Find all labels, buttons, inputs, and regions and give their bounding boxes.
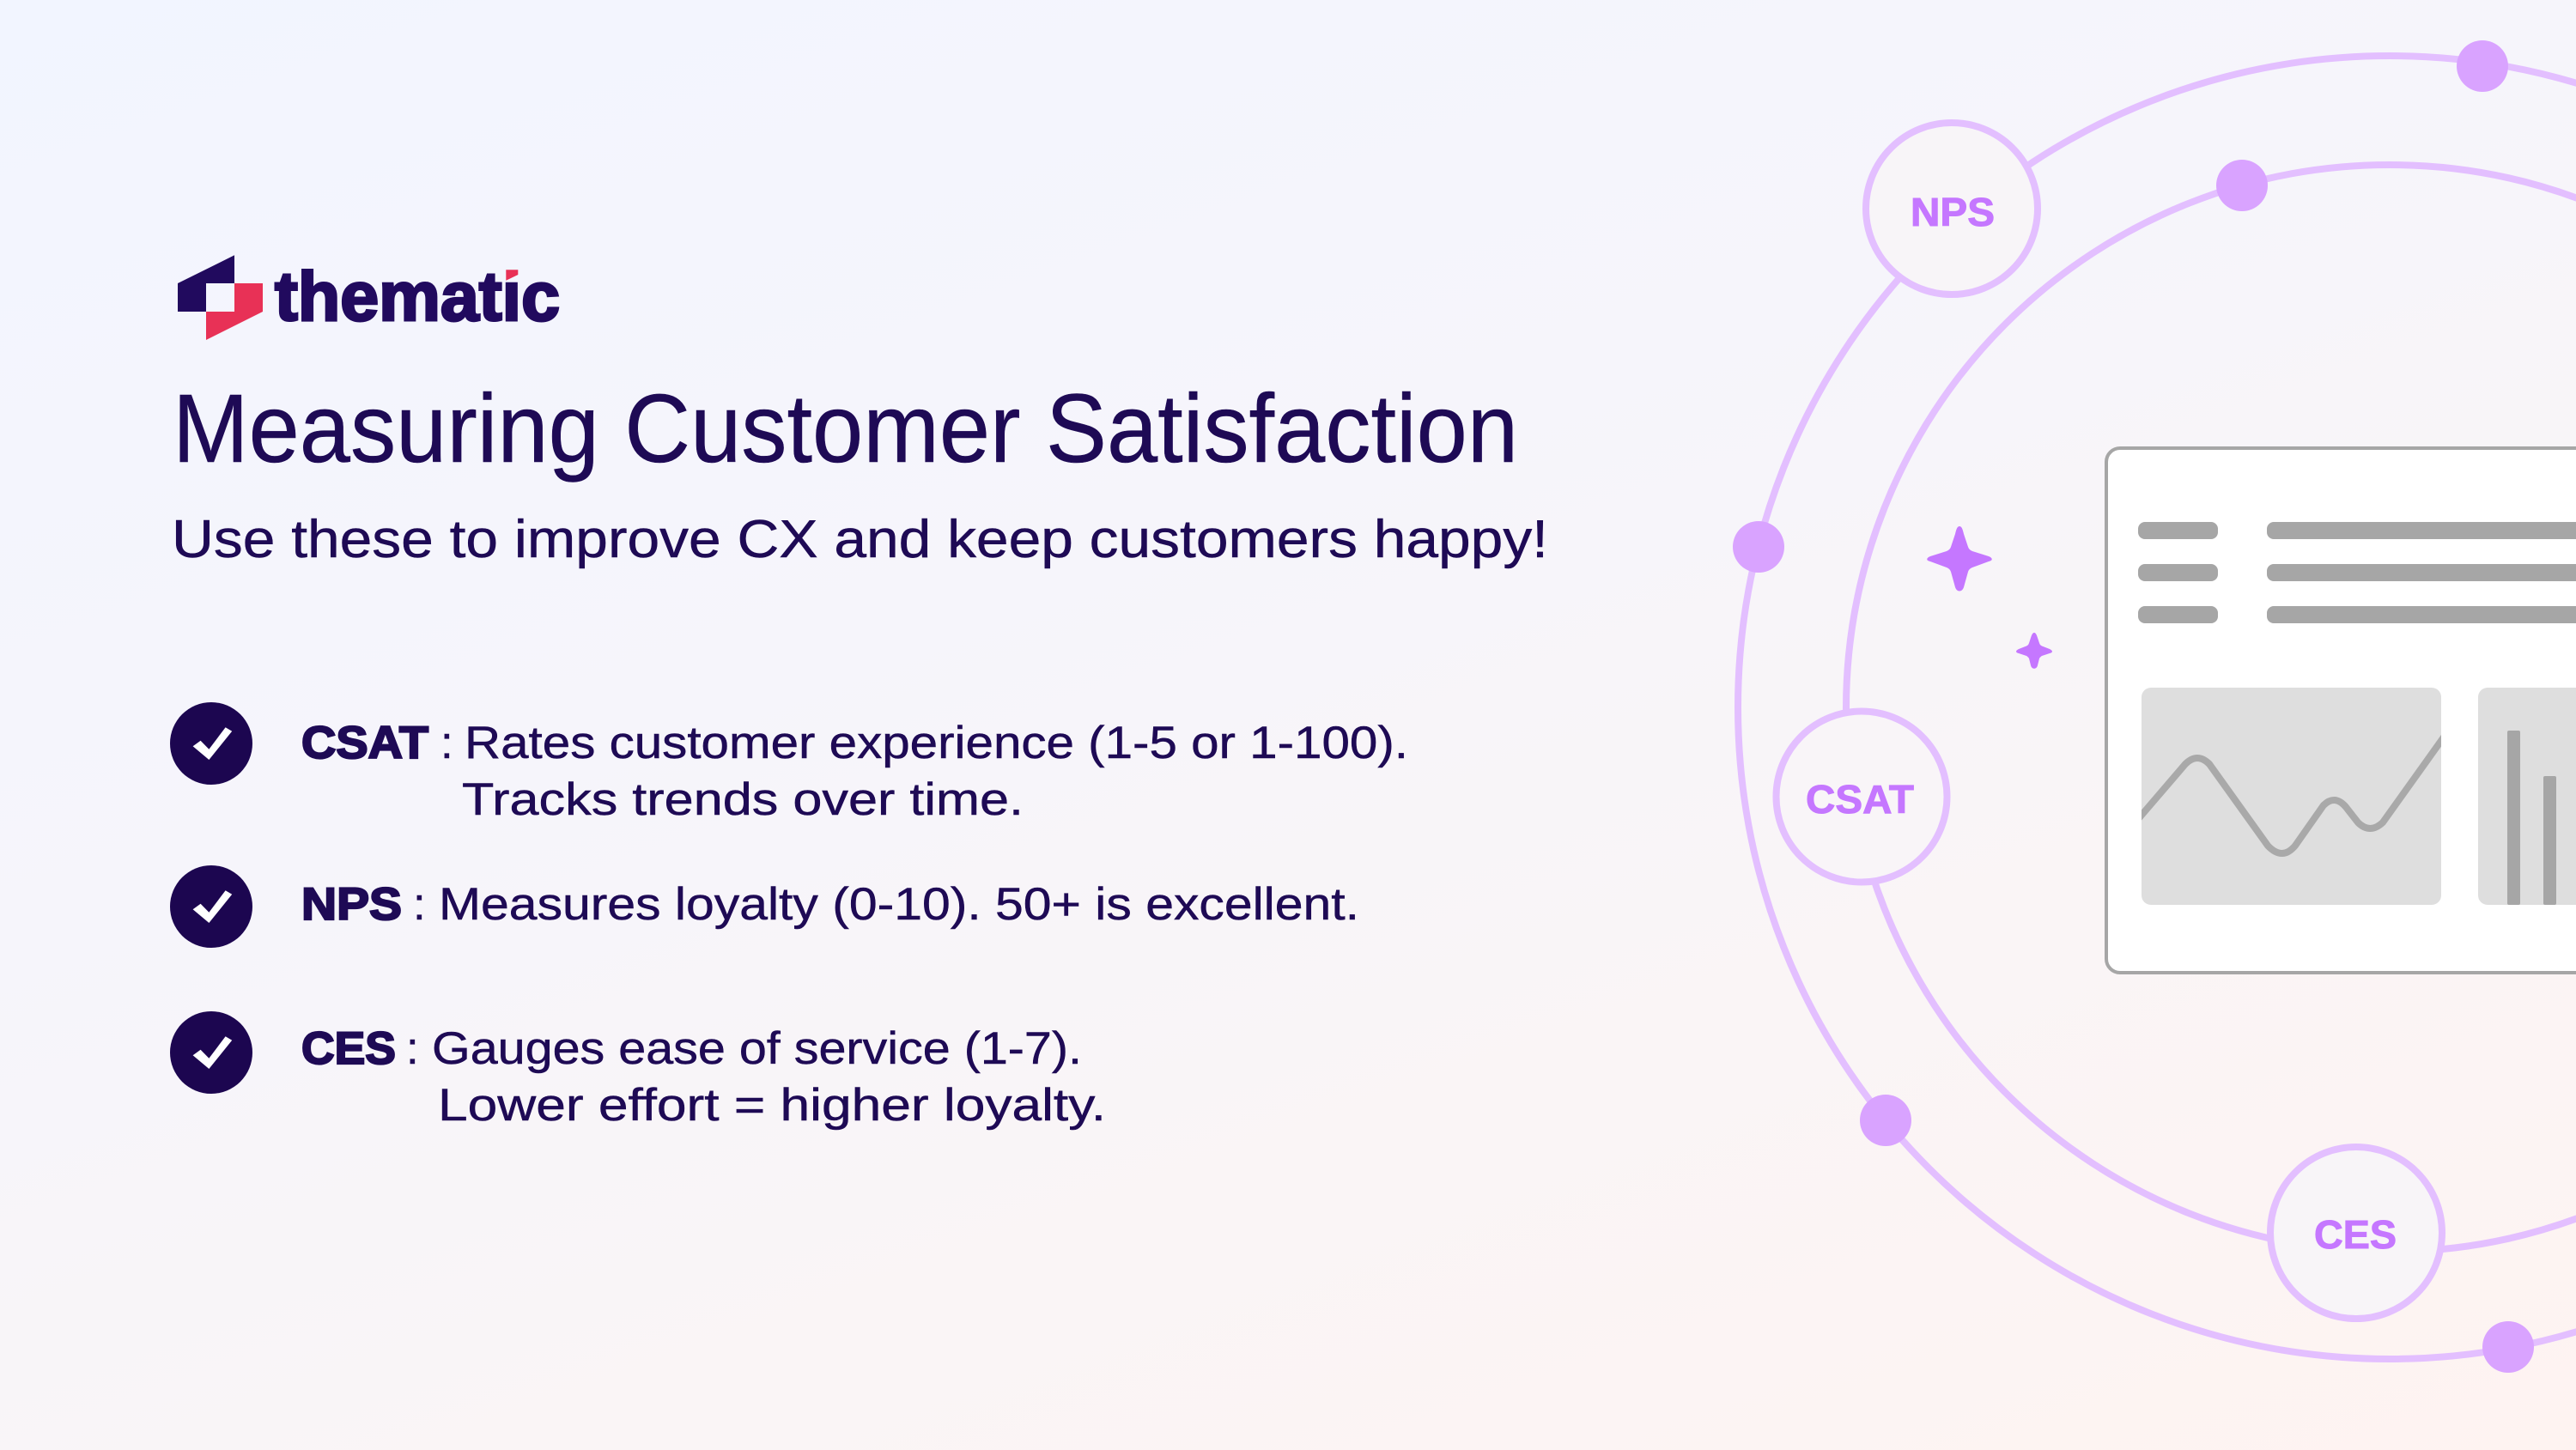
NPS text: NPS	[301, 879, 402, 930]
list item: CES	[170, 1011, 1106, 1131]
badge: CES: CES	[2314, 1212, 2397, 1257]
dashboard panel	[2106, 448, 2576, 973]
CES text: CES	[301, 1023, 396, 1074]
logo: thematic: thematic	[275, 258, 560, 336]
icon: check badge	[170, 1011, 252, 1094]
logo: thematic	[178, 255, 560, 340]
badge: NPS	[1866, 123, 2038, 294]
CSAT text	[301, 718, 1408, 825]
line chart	[2134, 688, 2451, 905]
icon: check badge	[170, 702, 252, 785]
orbit rings	[1738, 56, 2576, 1359]
NPS text: Measures loyalty (0-10). 50+ is excellent.	[439, 879, 1359, 930]
icon: check badge	[170, 865, 252, 948]
badge: NPS: NPS	[1911, 190, 1995, 234]
CES text: :	[406, 1023, 419, 1074]
CES text: Gauges ease of service (1-7).	[432, 1023, 1082, 1074]
icon: large sparkle	[1927, 526, 1992, 591]
badge: CSAT	[1776, 711, 1947, 883]
NPS text: :	[413, 879, 426, 930]
list item: NPS	[170, 865, 1359, 948]
badge: CSAT: CSAT	[1806, 777, 1914, 822]
list item: CSAT	[170, 702, 1408, 825]
subtitle: Use these to improve CX and keep customers happy!	[172, 510, 1548, 569]
badge: CES	[2270, 1147, 2442, 1319]
CSAT text: :	[440, 718, 453, 768]
bar chart	[2478, 688, 2576, 905]
CES text	[301, 1023, 1106, 1131]
CES text: Lower effort = higher loyalty.	[438, 1080, 1106, 1131]
title: Measuring Customer Satisfaction	[173, 374, 1518, 482]
CSAT text: CSAT	[301, 718, 428, 768]
CSAT text: Rates customer experience (1-5 or 1-100).	[465, 718, 1408, 768]
orbit dots	[1733, 40, 2534, 1373]
CSAT text: Tracks trends over time.	[462, 774, 1024, 825]
icon: small sparkle	[2016, 633, 2052, 669]
text lines	[2138, 522, 2576, 623]
